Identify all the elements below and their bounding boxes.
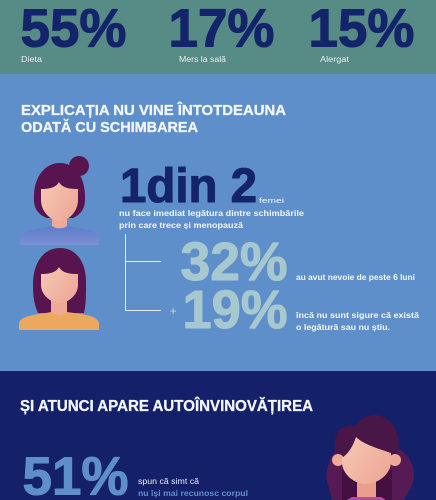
stat: 51%: spun că simt că bbox=[138, 476, 199, 486]
stat: 19%: 19% bbox=[182, 280, 288, 340]
stat: running: Alergat bbox=[320, 55, 350, 64]
stat: 32%: au avut nevoie de peste 6 luni bbox=[296, 272, 415, 282]
stat: gym: Mers la sală bbox=[179, 55, 227, 64]
stat: gym: 17% bbox=[168, 0, 274, 58]
stat: 1 in 2: femei bbox=[259, 196, 284, 205]
stat: 51%: nu își mai recunosc corpul bbox=[138, 488, 248, 498]
stat: 32%: 32% bbox=[180, 232, 288, 292]
icon: woman with wavy hair bbox=[327, 415, 414, 500]
icon: woman with bun bbox=[20, 156, 99, 245]
bracket lines bbox=[126, 234, 161, 310]
stat: running: 15% bbox=[308, 0, 414, 58]
stat: 19%: încă nu sunt sigure că există bbox=[295, 310, 419, 320]
icon: woman with long hair bbox=[19, 248, 99, 330]
heading: explanation: EXPLICAȚIA NU VINE ÎNTOTDEAUNA bbox=[21, 101, 286, 119]
panel: explanation bbox=[0, 74, 436, 371]
heading: self blame: ȘI ATUNCI APARE AUTOÎNVINOVĂȚIREA bbox=[20, 397, 313, 415]
stat: 19%: o legătură sau nu știu. bbox=[296, 322, 390, 332]
stat: diet: 55% bbox=[20, 0, 126, 58]
stat: 1 in 2: nu face imediat legătura dintre schimbările bbox=[119, 208, 304, 218]
stat: 1 in 2: prin care trece și menopauză bbox=[119, 220, 243, 230]
stat: 19%: + bbox=[170, 306, 176, 318]
stat: 1 in 2 bbox=[119, 160, 304, 230]
stat: 32% bbox=[180, 232, 415, 292]
panel: self blame bbox=[0, 371, 436, 500]
stat: diet: Dieta bbox=[21, 55, 43, 64]
heading: explanation bbox=[21, 101, 286, 136]
stat: 51% bbox=[22, 446, 248, 500]
stat: 19% bbox=[170, 280, 419, 340]
panel: activities bbox=[0, 0, 436, 74]
heading: explanation: ODATĂ CU SCHIMBAREA bbox=[21, 119, 198, 136]
stat: 1 in 2: 1din 2 bbox=[120, 160, 257, 213]
